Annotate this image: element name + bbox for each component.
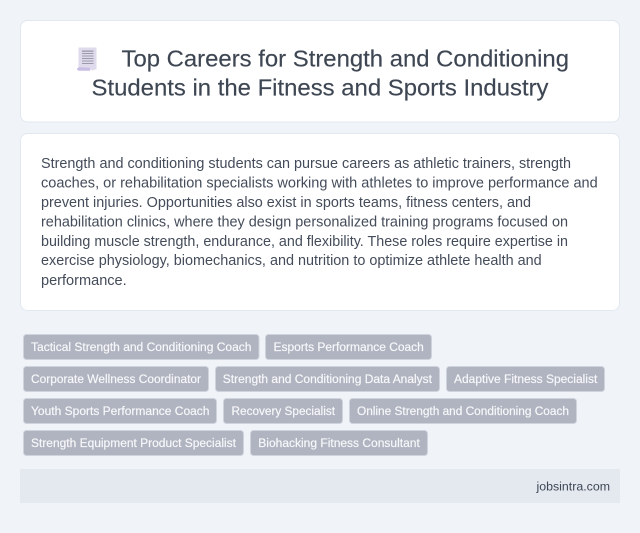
tag: Youth Sports Performance Coach	[24, 398, 216, 424]
title	[92, 46, 569, 100]
summary text: coaches, or rehabilitation specialists working with athletes to improve performance and	[41, 176, 598, 192]
tag: Recovery Specialist	[224, 398, 342, 424]
tag: Corporate Wellness Coordinator	[24, 366, 208, 392]
footer bar	[20, 469, 620, 503]
summary text: prevent injuries. Opportunities also exist in sports teams, fitness centers, and	[41, 195, 531, 211]
summary text: building muscle strength, endurance, and flexibility. These roles require expertise in	[41, 234, 568, 250]
tag: Esports Performance Coach: Esports Performance Coach	[274, 340, 424, 354]
icon: paper receipt	[77, 48, 96, 71]
tag: Strength and Conditioning Data Analyst: Strength and Conditioning Data Analyst	[223, 372, 433, 386]
tag: Adaptive Fitness Specialist: Adaptive Fitness Specialist	[454, 372, 598, 386]
tag: Online Strength and Conditioning Coach	[350, 398, 576, 424]
summary text: Strength and conditioning students can pursue careers as athletic trainers, strength	[41, 156, 571, 172]
tag: Tactical Strength and Conditioning Coach	[24, 334, 259, 360]
tag: Biohacking Fitness Consultant	[250, 430, 428, 456]
tag: Strength Equipment Product Specialist: Strength Equipment Product Specialist	[31, 436, 237, 450]
tag: Biohacking Fitness Consultant: Biohacking Fitness Consultant	[258, 436, 420, 450]
panel: header card	[20, 20, 620, 122]
title: Top Careers for Strength and Conditioning	[122, 46, 569, 72]
summary text: performance.	[41, 273, 127, 289]
panel: summary card	[20, 134, 620, 310]
tag: Strength Equipment Product Specialist	[24, 430, 244, 456]
tag: Tactical Strength and Conditioning Coach: Tactical Strength and Conditioning Coach	[31, 340, 252, 354]
tag: Online Strength and Conditioning Coach: Online Strength and Conditioning Coach	[357, 404, 569, 418]
tag: Esports Performance Coach	[266, 334, 432, 360]
footer source text: jobsintra.com	[536, 480, 610, 494]
summary text	[41, 156, 598, 289]
summary text: rehabilitation clinics, where they design personalized training programs focused on	[41, 214, 568, 230]
tag list	[24, 334, 604, 456]
tag: Recovery Specialist: Recovery Specialist	[232, 404, 336, 418]
tag: Adaptive Fitness Specialist	[446, 366, 604, 392]
summary text: exercise physiology, biomechanics, and nutrition to optimize athlete health and	[41, 253, 542, 269]
tag: Youth Sports Performance Coach: Youth Sports Performance Coach	[31, 404, 210, 418]
tag: Strength and Conditioning Data Analyst	[216, 366, 440, 392]
title: Students in the Fitness and Sports Industry	[92, 74, 549, 100]
tag: Corporate Wellness Coordinator: Corporate Wellness Coordinator	[31, 372, 201, 386]
